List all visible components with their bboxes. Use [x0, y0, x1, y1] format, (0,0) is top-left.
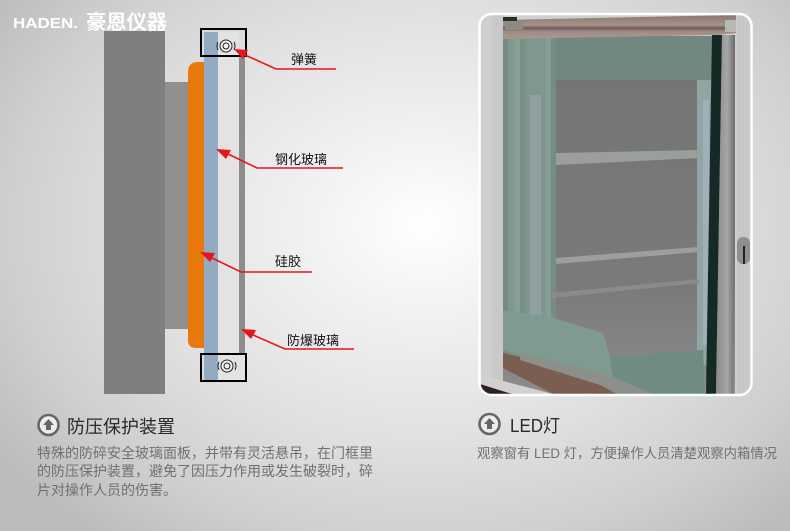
- cross-section diagram: [104, 29, 246, 394]
- top left hinge: [505, 21, 523, 30]
- icon: up arrow right: [480, 414, 500, 434]
- bottom left corner: [492, 378, 552, 394]
- shelf 1: [556, 150, 699, 165]
- tempered glass: [204, 32, 218, 380]
- shelf 2: [556, 247, 699, 264]
- body text: pressure protection device: 的防压保护装置，避免了因压力作用或发生破裂时，碎: [37, 463, 373, 479]
- heading: LED light: LED灯: [510, 416, 560, 436]
- top bracket: [201, 29, 246, 56]
- explosion-proof glass: [239, 56, 245, 353]
- bottom spring: [218, 360, 236, 372]
- callout: spring: [234, 49, 336, 69]
- logo: 豪恩仪器: [86, 10, 167, 34]
- left glass edge: [503, 36, 556, 352]
- inner light gap: [218, 32, 239, 380]
- top rail: [503, 15, 736, 39]
- callout: silicone: 硅胶: [275, 254, 301, 269]
- callout: silicone: [200, 252, 312, 272]
- callout: spring: 弹簧: [291, 52, 317, 67]
- door frame: [480, 15, 751, 394]
- bottom rail: [503, 353, 617, 394]
- logo: HADEN.: [13, 15, 78, 32]
- lower glass: [503, 310, 613, 377]
- callout: explosion-proof glass: 防爆玻璃: [287, 333, 339, 348]
- icon: up arrow left: [38, 415, 58, 435]
- door latch: [737, 237, 750, 264]
- top spring: [217, 40, 235, 52]
- callout: tempered glass: [216, 149, 343, 168]
- photo border: [480, 14, 752, 395]
- door liner: [165, 82, 189, 329]
- photo: chamber door window: [480, 14, 752, 395]
- shelf 3: [552, 279, 699, 298]
- door wall: [104, 31, 165, 394]
- right metal post: [716, 35, 735, 394]
- chamber interior: [503, 36, 735, 394]
- body text: LED light: 观察窗有 LED 灯，方便操作人员清楚观察内箱情况: [477, 445, 777, 461]
- dark seal: [706, 35, 722, 394]
- body text: pressure protection device: 特殊的防碎安全玻璃面板，并带有灵活悬吊，在门框里: [37, 445, 373, 461]
- body text: pressure protection device: 片对操作人员的伤害。: [37, 482, 177, 498]
- right glass edge: [697, 80, 712, 365]
- bottom bracket: [201, 354, 246, 381]
- callout: explosion-proof glass: [241, 329, 354, 349]
- top right hinge: [725, 20, 736, 32]
- logo: [13, 10, 167, 34]
- callout: tempered glass: 钢化玻璃: [275, 152, 327, 167]
- heading: pressure protection device: 防压保护装置: [67, 417, 175, 437]
- upper glass band: [556, 36, 714, 80]
- body text: pressure protection device: [37, 445, 373, 498]
- silicone strip: [188, 62, 204, 348]
